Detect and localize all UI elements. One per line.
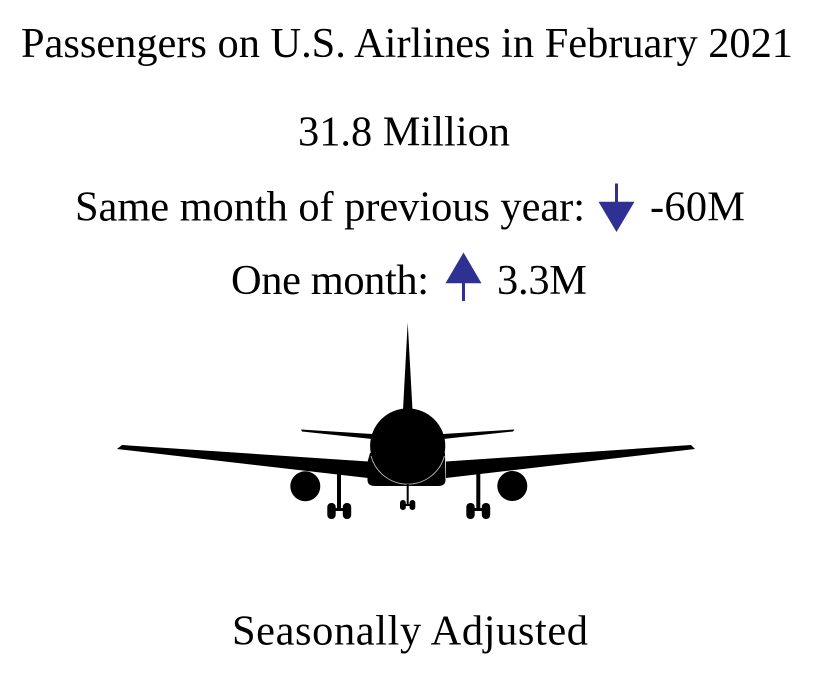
previous year change: -60M	[650, 184, 745, 230]
icon: airplane front view	[117, 322, 695, 519]
one month change: 3.3M	[497, 257, 587, 304]
headline value: 31.8 Million	[298, 108, 510, 156]
title: Passengers on U.S. Airlines in February 2021	[21, 20, 793, 67]
right landing gear	[470, 474, 486, 511]
lower fuselage	[368, 453, 446, 486]
left wheels	[327, 503, 351, 519]
previous year label: Same month of previous year:	[75, 184, 585, 230]
tail fin	[403, 322, 412, 410]
wings	[117, 445, 695, 478]
engines	[290, 471, 527, 501]
one month label: One month:	[231, 257, 429, 304]
fuselage highlight	[371, 456, 444, 484]
fuselage	[370, 408, 445, 484]
footnote: Seasonally Adjusted	[232, 608, 588, 654]
nose landing gear	[403, 484, 413, 506]
previous year comparison	[75, 184, 745, 232]
nose wheels	[400, 500, 415, 510]
icon: up arrow	[446, 252, 482, 301]
left landing gear	[331, 474, 347, 511]
tailplanes	[301, 430, 514, 439]
one month comparison	[231, 252, 587, 304]
right wheels	[466, 503, 490, 519]
icon: down arrow	[598, 184, 634, 232]
